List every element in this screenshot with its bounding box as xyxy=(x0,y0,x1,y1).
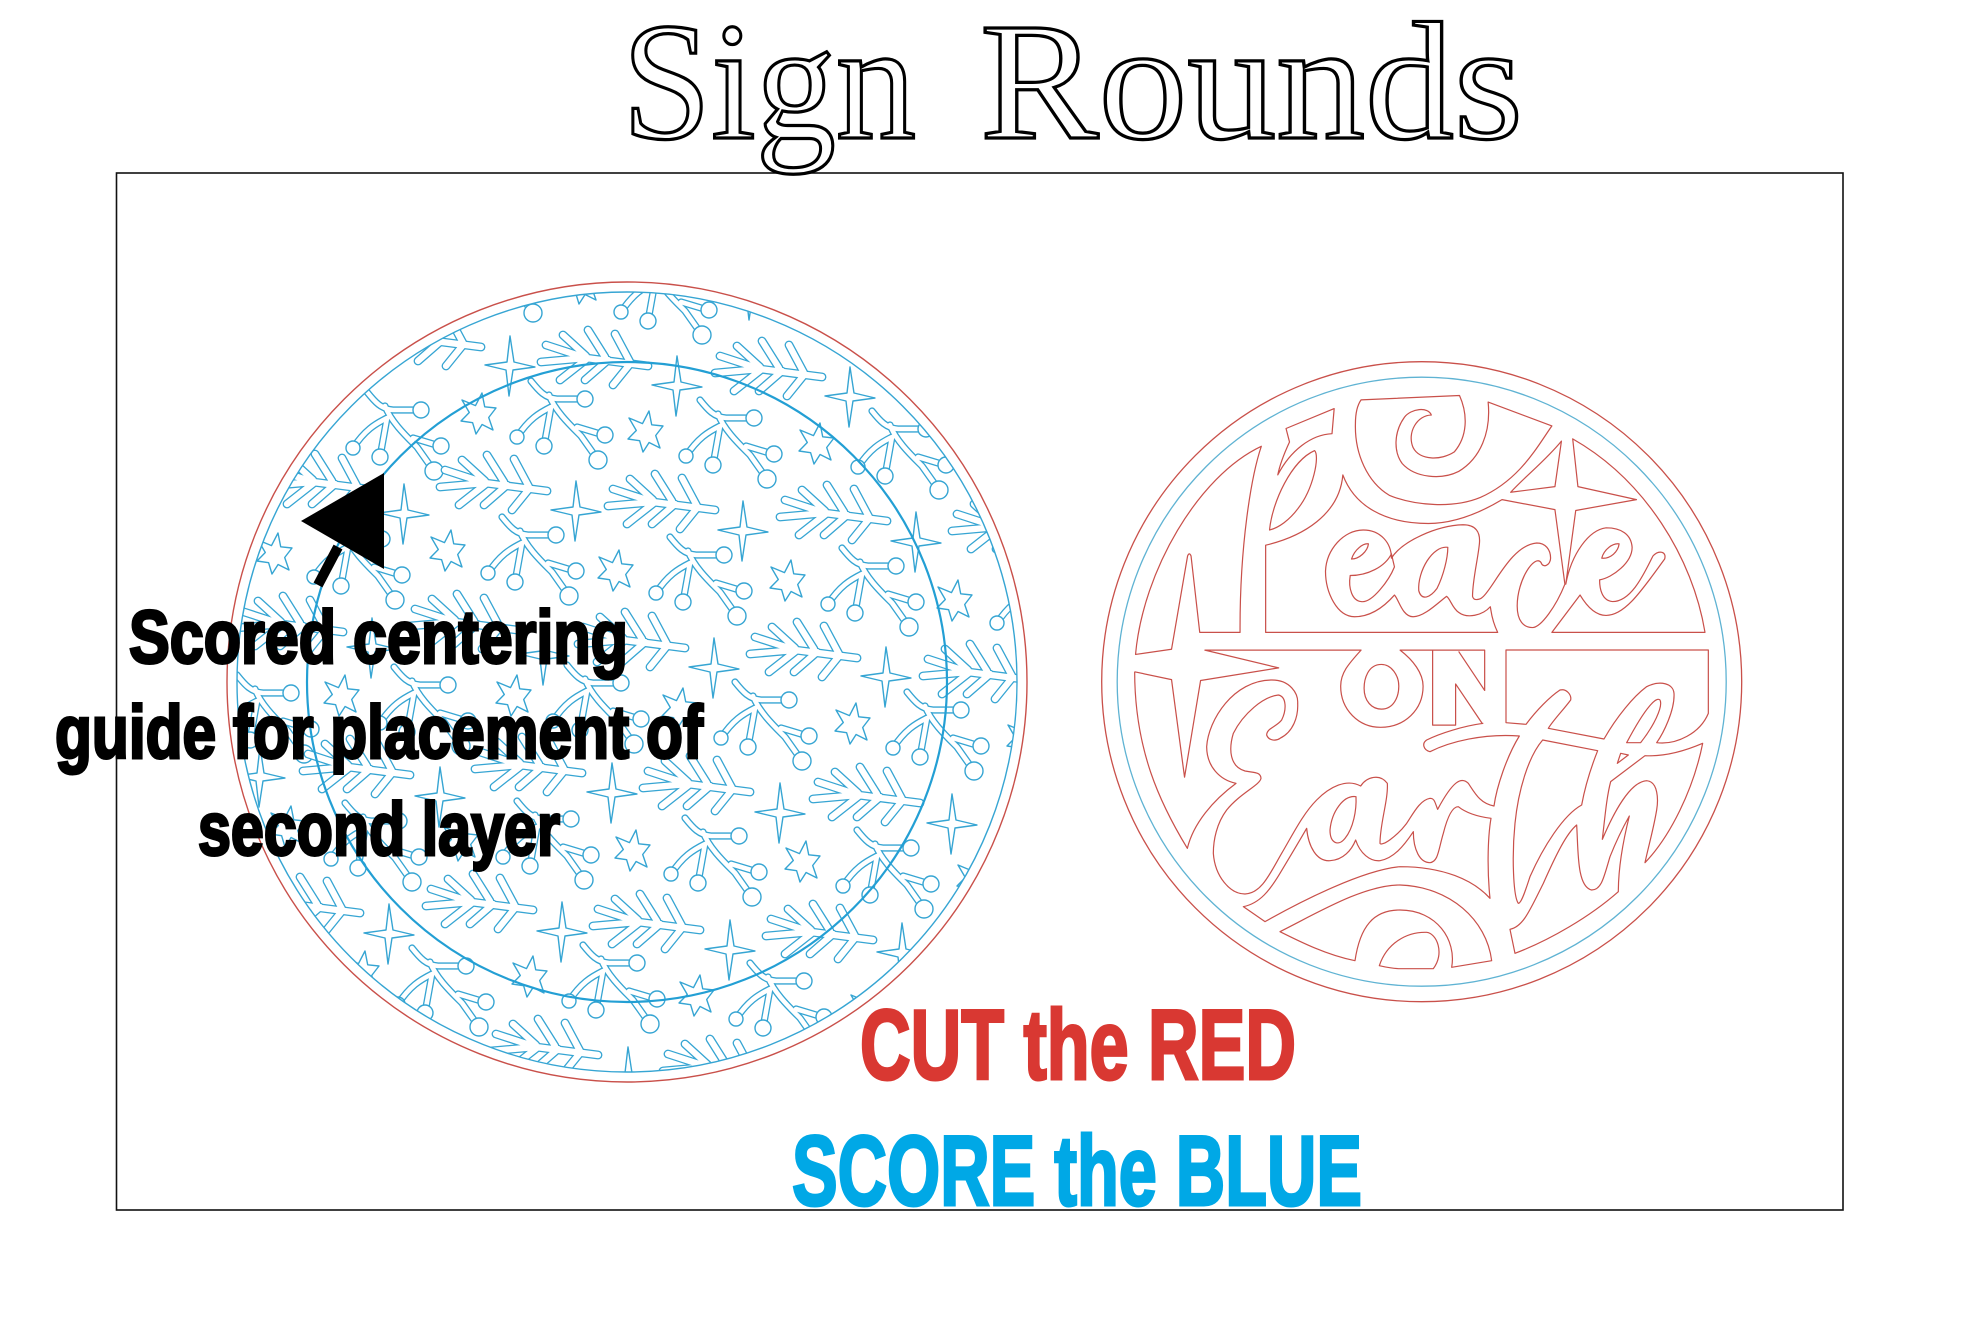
legend: cut the red: CUT the RED xyxy=(860,989,1296,1100)
blue outer score circle xyxy=(237,292,1017,1072)
pattern: stars, ferns and berry branches xyxy=(131,234,1093,1107)
callout: scored centering guide: second layer xyxy=(198,787,560,871)
callout: scored centering guide xyxy=(55,595,704,871)
legend: score the blue: SCORE the BLUE xyxy=(792,1115,1362,1226)
red outer circle xyxy=(1102,362,1742,1002)
arrow pointing at centering guide xyxy=(301,473,384,585)
blue centering guide circle xyxy=(307,362,947,1002)
blue score circle xyxy=(1117,377,1726,986)
title xyxy=(622,0,1523,175)
Peace and ON cut lines xyxy=(1135,396,1705,777)
red cut circle xyxy=(227,282,1027,1082)
frame xyxy=(116,173,1843,1210)
Earth cut lines xyxy=(1135,650,1708,969)
right sign round: Peace on Earth cut design xyxy=(1102,362,1742,1002)
left sign round: scored pattern disc xyxy=(226,281,1028,1083)
callout: scored centering guide: guide for placement of xyxy=(55,690,704,774)
callout: scored centering guide: Scored centering xyxy=(129,595,628,679)
